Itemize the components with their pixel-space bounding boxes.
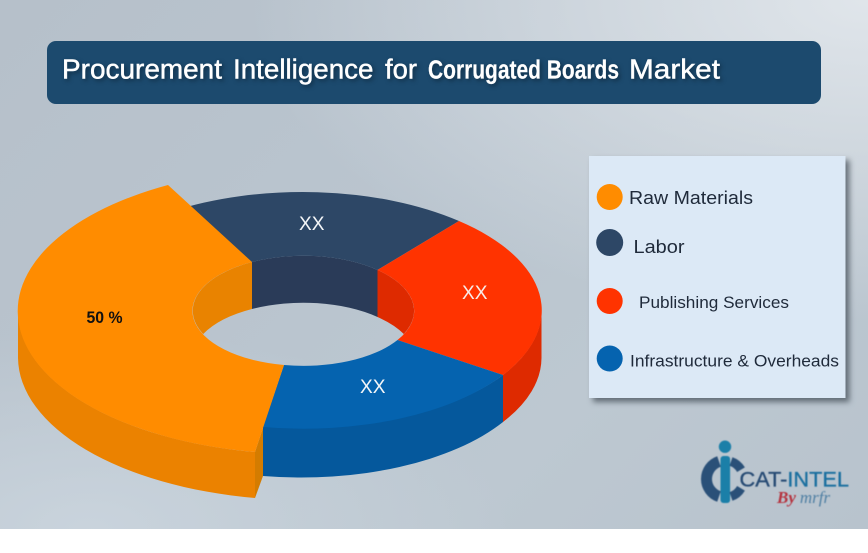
title banner: Corrugated Boards	[428, 56, 619, 84]
title banner: Procurement	[62, 54, 222, 84]
logo tagline: Bymrfr	[776, 488, 831, 507]
outer wall: publishing services	[503, 310, 542, 422]
inner wall: raw materials	[193, 262, 252, 334]
logo: CAT-INTEL by mrfr	[706, 440, 849, 507]
value label: infrastructure: XX	[360, 377, 386, 398]
segment: infrastructure and overheads	[263, 340, 503, 429]
segment: raw materials	[18, 185, 284, 452]
segment: publishing services	[378, 221, 542, 375]
logo icon	[706, 440, 741, 503]
outer wall: raw materials	[18, 311, 255, 498]
legend panel	[589, 156, 846, 398]
legend item: infrastructure and overheads: Infrastructure & Overheads	[630, 352, 839, 370]
value label: labor: XX	[299, 214, 325, 235]
legend item: publishing services: Publishing Services	[639, 294, 789, 312]
inner wall: publishing services	[378, 270, 414, 334]
legend item: raw materials	[597, 184, 753, 210]
logo wordmark: CAT-INTEL	[740, 469, 849, 492]
title banner	[47, 41, 821, 104]
3D donut chart	[18, 185, 542, 498]
legend item: raw materials: Raw Materials	[629, 187, 753, 208]
title banner: for	[385, 54, 417, 84]
value label: publishing services: XX	[462, 283, 488, 304]
segment: labor	[170, 192, 459, 270]
legend item: labor	[596, 229, 684, 257]
cut face of raw materials slice	[255, 428, 263, 498]
title banner: Market	[629, 54, 720, 84]
legend item: infrastructure and overheads	[597, 346, 839, 372]
legend item: labor: Labor	[634, 236, 684, 257]
value label: raw materials: 50 %	[86, 309, 123, 327]
legend item: publishing services	[597, 288, 789, 314]
title banner: Intelligence	[233, 54, 374, 84]
inner wall: labor	[252, 256, 378, 317]
outer wall: infrastructure	[263, 375, 503, 478]
